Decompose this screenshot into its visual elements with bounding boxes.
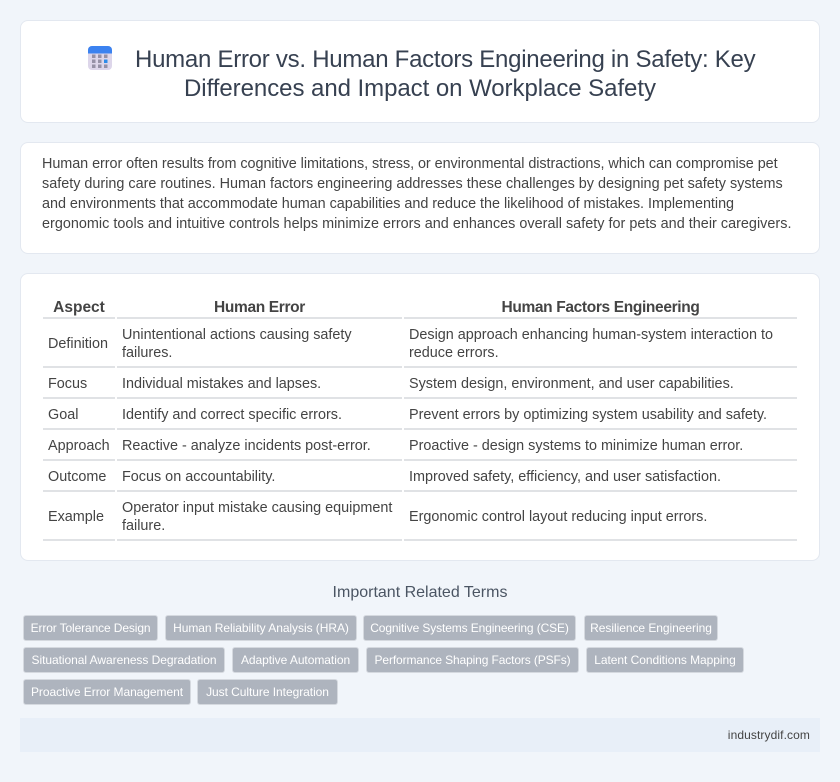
row: Example: [48, 500, 707, 534]
text block: introduction: Human error often results from cognitive limitations, stress, or environmental distractions, which can compromise pet: [42, 156, 778, 172]
icon: calendar: [88, 46, 112, 70]
row: Outcome: Improved safety, efficiency, and user satisfaction.: [409, 469, 721, 485]
panel: introduction text: [20, 142, 820, 254]
row: Outcome: [48, 469, 721, 485]
panel: comparison table: [20, 273, 820, 561]
row: Focus: Focus: [48, 376, 87, 392]
tag: [586, 647, 744, 673]
tag: Proactive Error Management: [31, 685, 183, 699]
row: Definition: Definition: [48, 336, 108, 352]
text block: introduction: [42, 156, 791, 232]
row: Approach: Reactive - analyze incidents post-error.: [122, 438, 371, 454]
table header: Human Error: [214, 299, 305, 316]
footer credit: industrydif.com: [728, 728, 810, 742]
row: Definition: Design approach enhancing human-system interaction to: [409, 327, 773, 343]
row: Goal: Identify and correct specific errors.: [122, 407, 342, 423]
row: Goal: [48, 407, 767, 423]
text block: introduction: and environments that accommodate human capabilities and reduce the likelihood of mistakes. Implementing: [42, 196, 734, 212]
tag: Performance Shaping Factors (PSFs): [374, 653, 570, 667]
tag: Just Culture Integration: [206, 685, 329, 699]
tag: [23, 647, 225, 673]
title: [135, 46, 756, 102]
title: Differences and Impact on Workplace Safety: [184, 75, 656, 102]
heading: Important Related Terms: Important Related Terms: [333, 584, 507, 601]
tag: Cognitive Systems Engineering (CSE): [370, 621, 569, 635]
text block: introduction: safety during care routines. Human factors engineering addresses these challenges by designing pet safety systems: [42, 176, 783, 192]
tag: [23, 679, 191, 705]
row: Definition: Unintentional actions causing safety: [122, 327, 352, 343]
row: Goal: Goal: [48, 407, 78, 423]
table header: Human Factors Engineering: [502, 299, 699, 316]
tag: [584, 615, 718, 641]
row: Goal: Prevent errors by optimizing system usability and safety.: [409, 407, 767, 423]
row: Focus: [48, 376, 734, 392]
table header: Aspect: [53, 299, 105, 316]
tag: [363, 615, 576, 641]
row: Example: Example: [48, 509, 104, 525]
row: Definition: reduce errors.: [409, 345, 499, 361]
tag: Error Tolerance Design: [31, 621, 150, 635]
table header: [53, 299, 699, 316]
row: Definition: failures.: [122, 345, 172, 361]
tag: Latent Conditions Mapping: [594, 653, 736, 667]
tag: Adaptive Automation: [241, 653, 350, 667]
tag: [366, 647, 579, 673]
tag group: related terms: [23, 615, 744, 705]
tag: [197, 679, 338, 705]
footer bar: [20, 718, 820, 752]
row: Outcome: Outcome: [48, 469, 106, 485]
tag: [165, 615, 357, 641]
row: Approach: [48, 438, 743, 454]
row: Example: Ergonomic control layout reducing input errors.: [409, 509, 707, 525]
text block: introduction: ergonomic tools and intuitive controls helps minimize errors and enhances overall safety for pets and their caregivers.: [42, 216, 791, 232]
row: Focus: Individual mistakes and lapses.: [122, 376, 321, 392]
panel: header: [20, 20, 820, 123]
row: Focus: System design, environment, and user capabilities.: [409, 376, 734, 392]
row: Approach: Approach: [48, 438, 110, 454]
row: Outcome: Focus on accountability.: [122, 469, 275, 485]
row: Example: failure.: [122, 518, 165, 534]
row: Example: Operator input mistake causing equipment: [122, 500, 392, 516]
tag: Resilience Engineering: [590, 621, 712, 635]
tag: [23, 615, 158, 641]
tag: Situational Awareness Degradation: [32, 653, 216, 667]
title: Human Error vs. Human Factors Engineering in Safety: Key: [135, 46, 755, 73]
row: Definition: [48, 327, 773, 361]
row: Approach: Proactive - design systems to minimize human error.: [409, 438, 743, 454]
tag: Human Reliability Analysis (HRA): [173, 621, 349, 635]
tag: [232, 647, 359, 673]
